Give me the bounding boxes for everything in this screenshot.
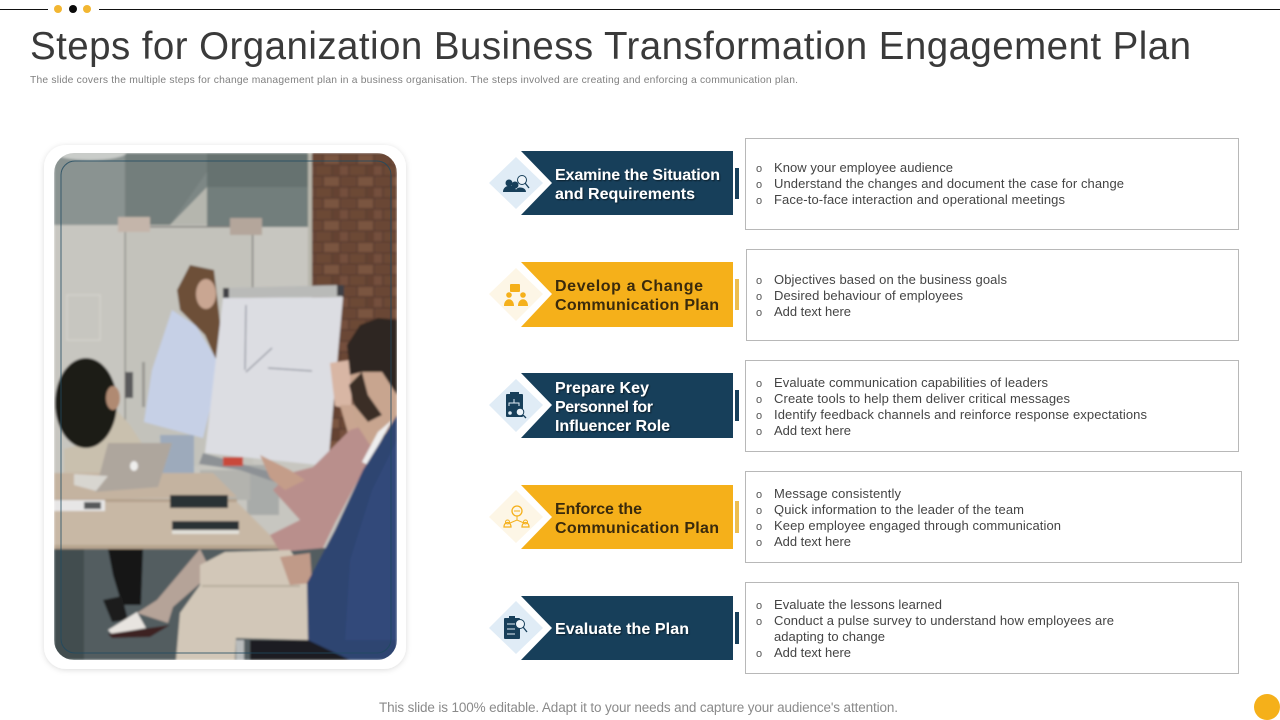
step 3 accent bar [735, 390, 739, 421]
step 1 details: o [756, 195, 762, 207]
lower table [54, 473, 237, 500]
step 4 details: o [756, 521, 762, 533]
step 1 details: Know your employee audience [774, 160, 953, 175]
step 4 details [746, 472, 1242, 562]
seated woman in pink [330, 360, 352, 410]
photo panel [44, 145, 406, 669]
step 5 details: o [756, 648, 762, 660]
step 1 details: o [756, 179, 762, 191]
step 5 banner [521, 596, 733, 660]
step 2 icon [489, 268, 543, 321]
step 5 icon [489, 601, 543, 654]
step 4 heading [555, 501, 719, 537]
whiteboard [205, 297, 343, 466]
subtitle: The slide covers the multiple steps for change management plan in a business organisation. The steps involved are creating and enforcing a communication plan. [30, 75, 798, 86]
step 1 icon [489, 157, 543, 209]
step 3 details [746, 360, 1238, 452]
step 1 heading: and Requirements [555, 186, 695, 203]
step 4 heading: Enforce the [555, 501, 642, 518]
step 4 icon [489, 490, 543, 543]
presenter [160, 435, 194, 474]
step 3 details: o [756, 410, 762, 422]
step 2 details: o [756, 307, 762, 319]
chart stand [247, 465, 279, 515]
step 3 heading: Influencer Role [555, 418, 670, 435]
corner badge [1254, 694, 1280, 720]
step 5 details: Evaluate the lessons learned [774, 597, 942, 612]
step 1 details: o [756, 163, 762, 175]
step 2 details: o [756, 275, 762, 287]
step 3 details: o [756, 378, 762, 390]
chair [250, 640, 350, 660]
photo: team meeting at a whiteboard [54, 146, 397, 660]
step 2 details: o [756, 291, 762, 303]
step 1 accent bar [735, 168, 739, 199]
step 5 details: Conduct a pulse survey to understand how employees are [774, 613, 1114, 628]
step 3 details: Create tools to help them deliver critical messages [774, 391, 1070, 406]
step 5 details: o [756, 616, 762, 628]
notebooks and paper [170, 495, 228, 508]
step 3 heading: Prepare Key [555, 380, 649, 397]
step 5 details [746, 582, 1238, 674]
step 5 heading: Evaluate the Plan [555, 621, 689, 638]
step 4 accent bar [735, 501, 739, 533]
step 2 heading: Communication Plan [555, 297, 719, 314]
step 1 details: Face-to-face interaction and operational meetings [774, 192, 1066, 207]
step 1 heading: Examine the Situation [555, 167, 720, 184]
step 4 details: o [756, 489, 762, 501]
step 4 details: o [756, 505, 762, 517]
step 3 details: Add text here [774, 423, 851, 438]
beige trousers [176, 550, 312, 660]
laptop [95, 443, 172, 492]
step 5 details: o [756, 600, 762, 612]
step 3 details: Evaluate communication capabilities of leaders [774, 375, 1048, 390]
step 4 details: o [756, 537, 762, 549]
step 5 details: Add text here [774, 645, 851, 660]
top rule with dots [0, 5, 1280, 13]
thin inset frame [61, 161, 391, 653]
step 1 heading [555, 167, 720, 203]
step 2 heading [555, 278, 719, 314]
step 4 banner [521, 485, 733, 549]
step 3 heading [555, 380, 670, 435]
step 4 details: Message consistently [774, 486, 902, 501]
step 1 details [746, 138, 1238, 230]
title: Steps for Organization Business Transformation Engagement Plan [30, 25, 1191, 68]
step 3 heading: Personnel for [555, 399, 653, 416]
step 2 details: Add text here [774, 304, 851, 319]
step 4 details: Keep employee engaged through communication [774, 518, 1061, 533]
step 2 accent bar [735, 279, 739, 310]
step 3 banner [521, 373, 733, 438]
step 3 details: Identify feedback channels and reinforce response expectations [774, 407, 1148, 422]
step 2 banner [521, 262, 733, 327]
seated woman with curly hair [64, 412, 140, 474]
legs under table [108, 549, 143, 605]
step 5 details: adapting to change [774, 629, 885, 644]
step 2 details: Objectives based on the business goals [774, 272, 1008, 287]
man [350, 365, 397, 445]
step 2 heading: Develop a Change [555, 278, 703, 295]
step 3 details: o [756, 394, 762, 406]
step 3 icon [489, 379, 543, 432]
step 2 details: Desired behaviour of employees [774, 288, 964, 303]
step 5 accent bar [735, 612, 739, 644]
step 4 details: Add text here [774, 534, 851, 549]
footer note: This slide is 100% editable. Adapt it to your needs and capture your audience's attention. [379, 700, 898, 715]
step 1 banner [521, 151, 733, 215]
floor [82, 546, 327, 660]
step 3 details: o [756, 426, 762, 438]
step 2 details [746, 250, 1238, 340]
step 1 details: Understand the changes and document the case for change [774, 176, 1124, 191]
step 4 heading: Communication Plan [555, 520, 719, 537]
step 4 details: Quick information to the leader of the team [774, 502, 1024, 517]
